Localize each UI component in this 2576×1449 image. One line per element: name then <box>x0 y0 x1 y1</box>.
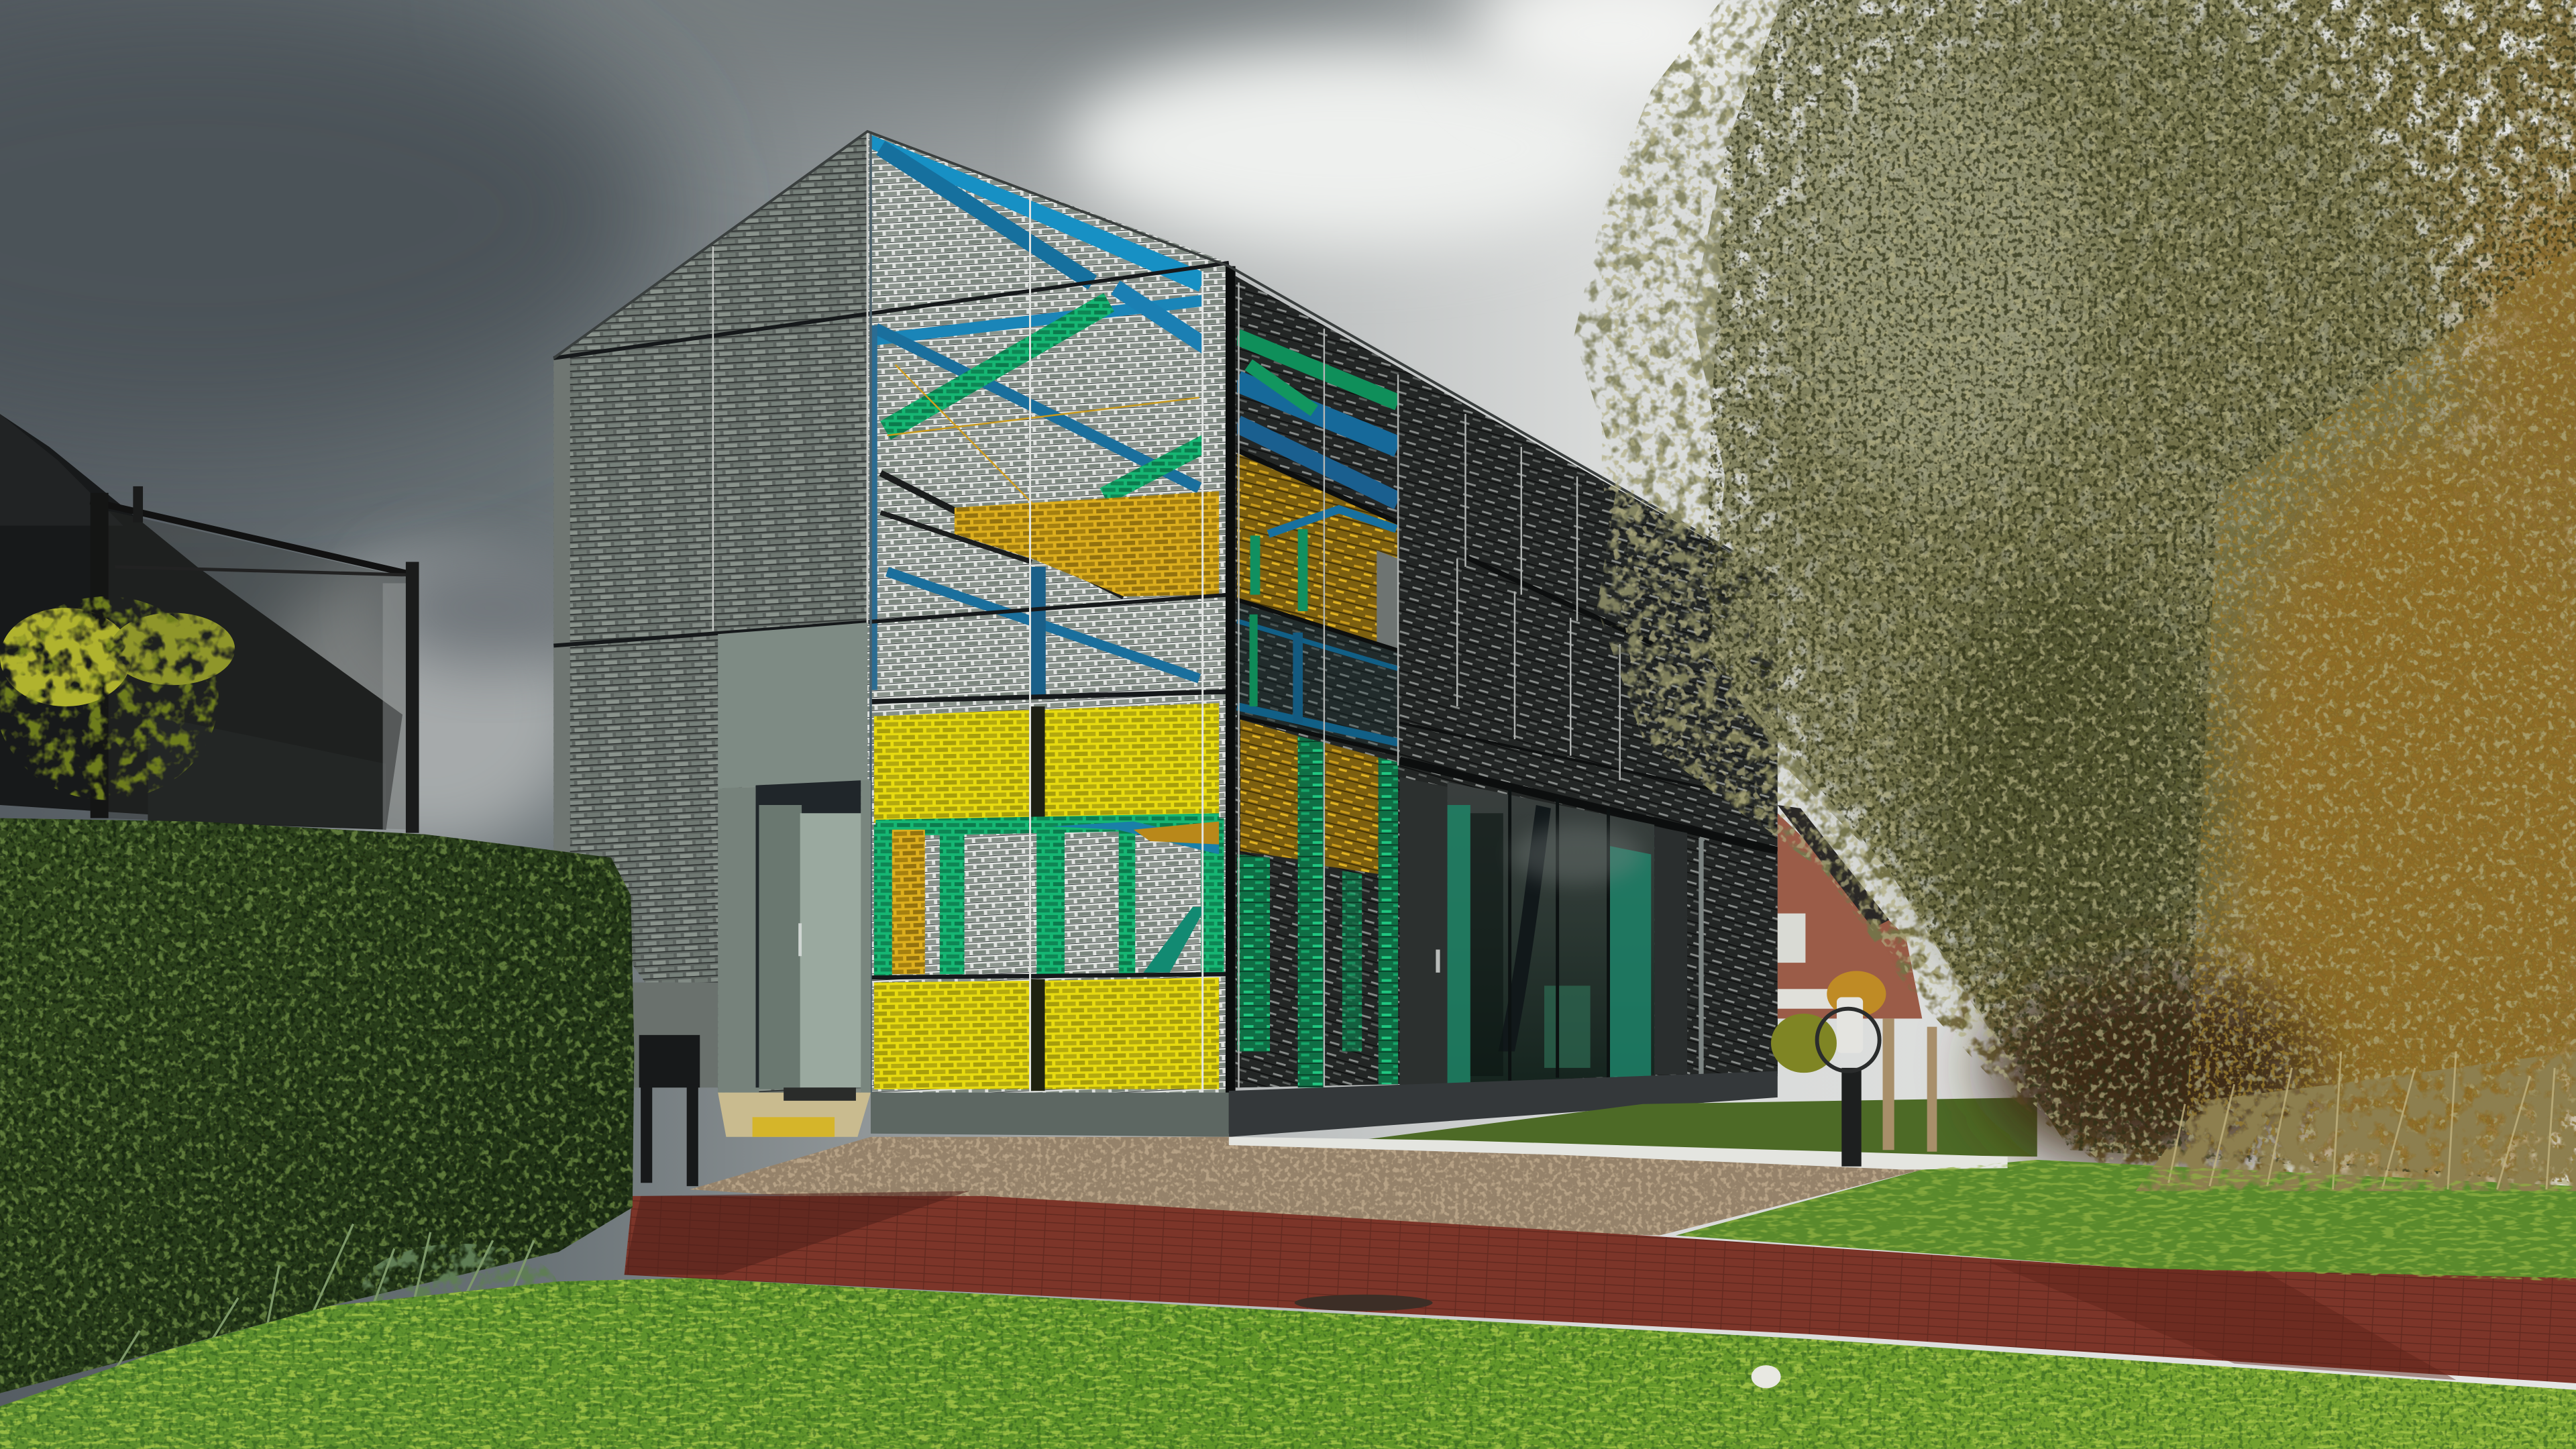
doorstep <box>718 1093 871 1137</box>
yellow step <box>753 1117 835 1137</box>
hedge <box>0 818 634 1393</box>
building: side facade <box>1229 276 1778 1137</box>
amber vertical stripe <box>892 830 925 974</box>
dark shade mid <box>1922 575 2218 1002</box>
amber upper right <box>2481 197 2576 559</box>
side plinth <box>1229 1071 1778 1137</box>
door recess <box>756 780 861 1087</box>
blue stripes over amber <box>1255 509 1398 649</box>
amber panel right <box>1324 743 1379 874</box>
right side door <box>1654 826 1687 1075</box>
green vertical stripes <box>1237 736 1398 1087</box>
green and white band <box>874 816 1219 976</box>
lower green panel <box>1237 720 1398 1087</box>
pale upper patch <box>1790 66 2086 493</box>
dark perforated cladding <box>1236 276 1778 1087</box>
left edge strip <box>553 348 570 854</box>
dark door mat <box>784 1087 856 1101</box>
coloured glass bands <box>871 138 1224 698</box>
yellow panels lower <box>874 981 1030 1089</box>
building: front gable facade <box>553 131 1774 1134</box>
end bay brick <box>1704 841 1778 1076</box>
inner dense foliage <box>1692 0 2576 1183</box>
light glass brick panel <box>867 131 1229 1093</box>
entrance <box>718 623 871 1137</box>
olive core <box>1774 0 2464 953</box>
amber yellow band <box>955 491 1219 596</box>
mid panel blue green stripes <box>1237 614 1398 743</box>
foreground lawn <box>0 1278 2576 1449</box>
amber panel left <box>1240 720 1298 859</box>
light leaf speckle <box>1602 0 2576 1191</box>
drain cover <box>1295 1295 1433 1311</box>
green stripes <box>874 813 1224 976</box>
EV charging post <box>1817 998 1937 1167</box>
right door leaf <box>800 813 863 1087</box>
upper amber panel <box>1237 453 1398 649</box>
gravel bed <box>690 1137 1922 1236</box>
side frame lines <box>1237 450 1778 851</box>
front frame lines <box>553 131 1230 1134</box>
dark vertical reflection <box>1030 706 1045 821</box>
shadow on path <box>625 1191 969 1275</box>
upper colour panel <box>1237 282 1398 521</box>
lower gray band below entry <box>633 982 718 1087</box>
dark door handle <box>1436 950 1440 973</box>
yellow-green shrub <box>0 596 235 800</box>
reeds at tree base <box>2136 1051 2576 1191</box>
amber lower right <box>2226 443 2576 1199</box>
right grass texture <box>1676 1160 2576 1281</box>
dark door <box>1400 777 1448 1086</box>
teal mid panel <box>1237 603 1398 753</box>
litter <box>1752 1365 1781 1388</box>
door handle <box>798 923 802 956</box>
amber leaf speckle <box>2185 246 2576 1183</box>
mid panel brick texture <box>1237 603 1398 753</box>
willow tree canopy <box>1574 0 2576 1199</box>
dark base <box>1988 969 2316 1167</box>
lawn behind gravel <box>1347 1097 2037 1157</box>
mailbox <box>639 1035 700 1186</box>
white kerb <box>1229 1137 2008 1170</box>
steel strip <box>1699 838 1705 1075</box>
gable edge <box>553 131 1774 575</box>
side panel dividers <box>1239 282 1620 1087</box>
left door leaf <box>759 805 802 1089</box>
black metal fence with mesh <box>91 486 419 833</box>
red brick cycle path <box>625 1191 2576 1383</box>
amber lintel <box>1134 821 1219 845</box>
outer sparse foliage <box>1574 0 2576 1191</box>
neighbouring house with dark roof <box>0 414 402 830</box>
neighbouring brick house <box>1771 805 1922 1073</box>
glass wall <box>1448 782 1654 1084</box>
gray brick cladding <box>553 131 871 1093</box>
entrance left jamb <box>718 787 759 1093</box>
front plinth <box>871 1093 1229 1137</box>
dark vertical reflection lower <box>1030 979 1045 1091</box>
entrance canopy panel <box>718 623 867 789</box>
glass wall reflections <box>1448 789 1651 1084</box>
yellow panels upper <box>874 710 1030 823</box>
entrance right jamb <box>861 780 871 1093</box>
foreground tall grass <box>99 1224 559 1397</box>
dark leaf speckle <box>1709 0 2576 1183</box>
grass right of path <box>1676 1160 2576 1281</box>
